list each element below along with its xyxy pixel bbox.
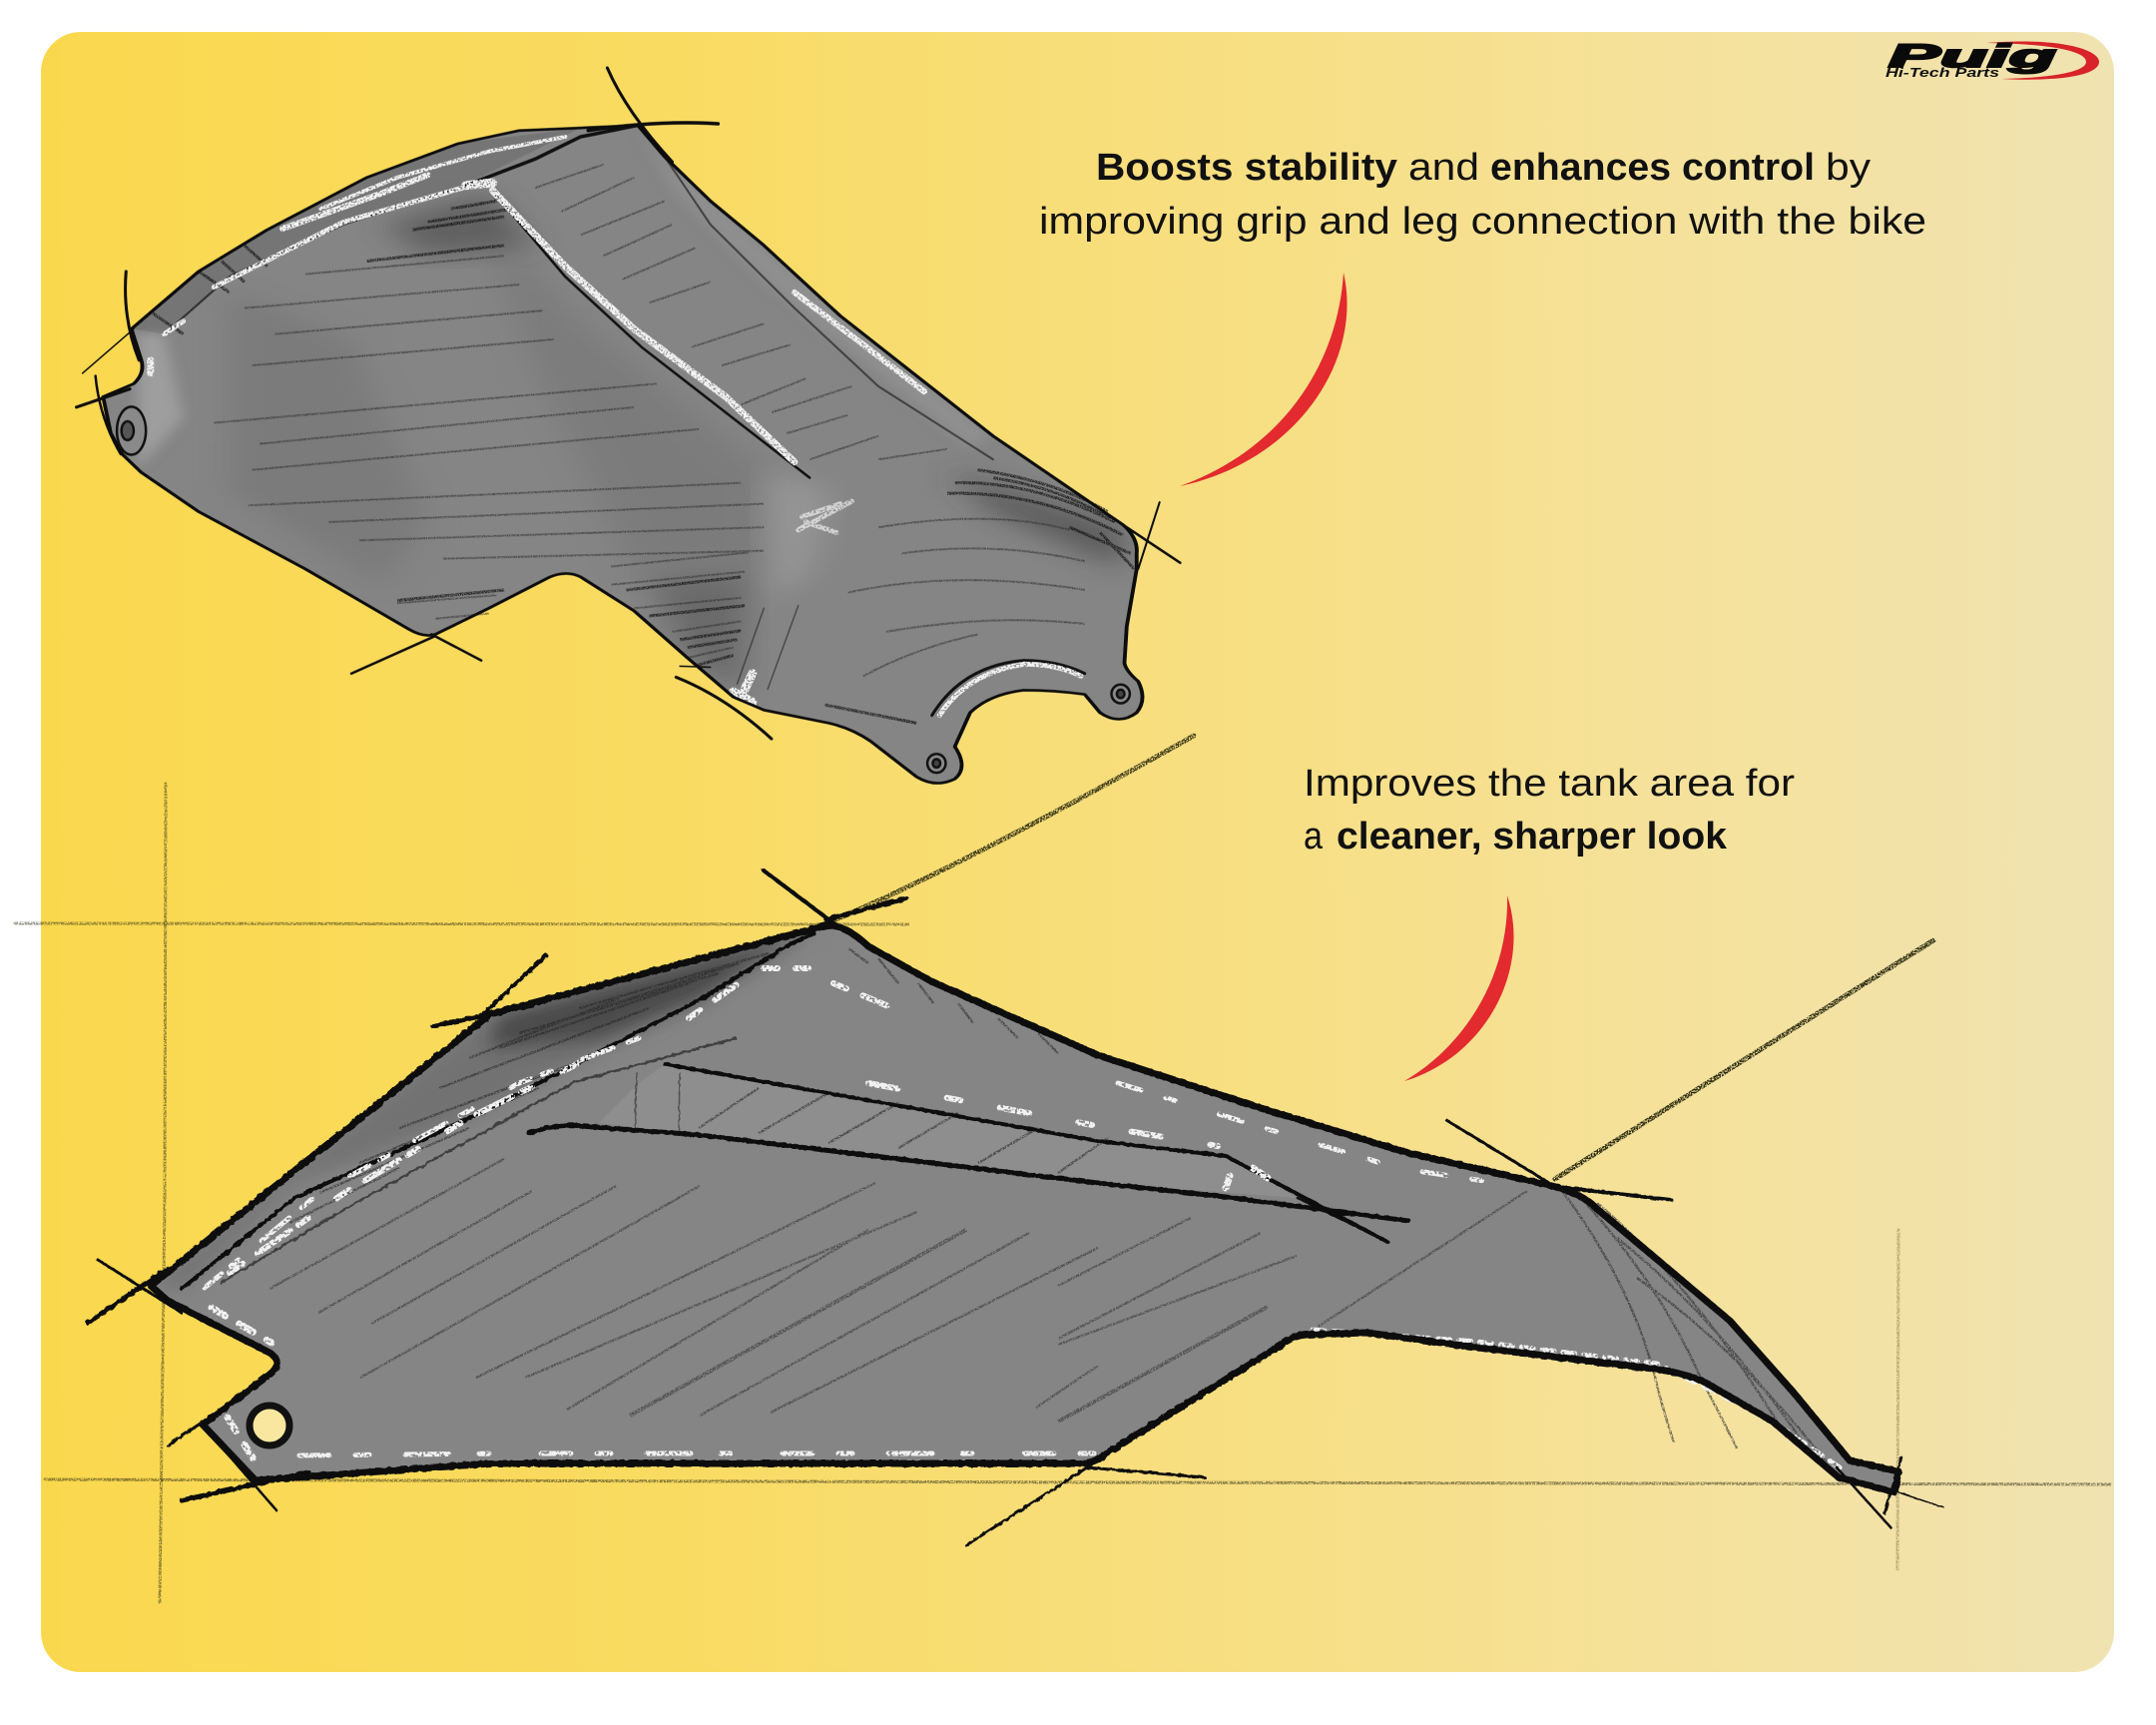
- red arc pointer: lower callout: [1404, 895, 1514, 1081]
- logo: Puig Hi-Tech Parts: [1886, 38, 2099, 80]
- logo: Puig Hi-Tech Parts: Hi-Tech Parts: [1886, 65, 1999, 80]
- text block: stability and control: improving grip and leg connection with the bike: [1039, 201, 1926, 243]
- white highlight dashes: [205, 968, 1847, 1472]
- text block: stability and control: Boosts stability: [1096, 147, 1397, 189]
- grey panel body: [103, 126, 1143, 784]
- construction lines behind lower sketch: [15, 736, 2110, 1602]
- text block: stability and control: and: [1408, 147, 1479, 189]
- diagonal hatch strokes: [270, 1159, 1527, 1422]
- dark hatching clusters: [153, 201, 1134, 723]
- text block: tank area look: [1304, 763, 1795, 858]
- ridge and inner contour lines: [165, 126, 1085, 716]
- text block: tank area look: Improves the tank area for: [1304, 763, 1795, 805]
- text block: tank area look: cleaner, sharper look: [1337, 816, 1728, 858]
- upper sketch: tank panel three-quarter view: [77, 68, 1180, 784]
- lower sketch: tank panel side view: [88, 870, 1943, 1545]
- red arc pointer: upper callout: [1180, 273, 1348, 486]
- crossing sketch strokes: [88, 870, 1943, 1545]
- grey panel body: [151, 925, 1898, 1492]
- white highlights: [151, 137, 1081, 716]
- soft shading: [132, 126, 1123, 695]
- logo: Puig Hi-Tech Parts: Puig: [1888, 38, 2056, 74]
- bolts: [117, 406, 1130, 773]
- panel outline: [151, 925, 1898, 1492]
- hatch lines on main face: [214, 165, 1085, 676]
- right fin curves: [1562, 1191, 1827, 1462]
- text block: stability and control: by: [1826, 147, 1871, 189]
- inner contour lines: [182, 933, 1408, 1289]
- outline: [103, 126, 1143, 784]
- mounting hole: [250, 1406, 289, 1445]
- text block: stability and control: [1039, 147, 1926, 243]
- text block: stability and control: enhances control: [1490, 147, 1815, 189]
- crossing sketch strokes: [77, 68, 1180, 739]
- shaded hatching inside lower panel: [151, 925, 1298, 1289]
- text block: tank area look: a: [1304, 816, 1324, 858]
